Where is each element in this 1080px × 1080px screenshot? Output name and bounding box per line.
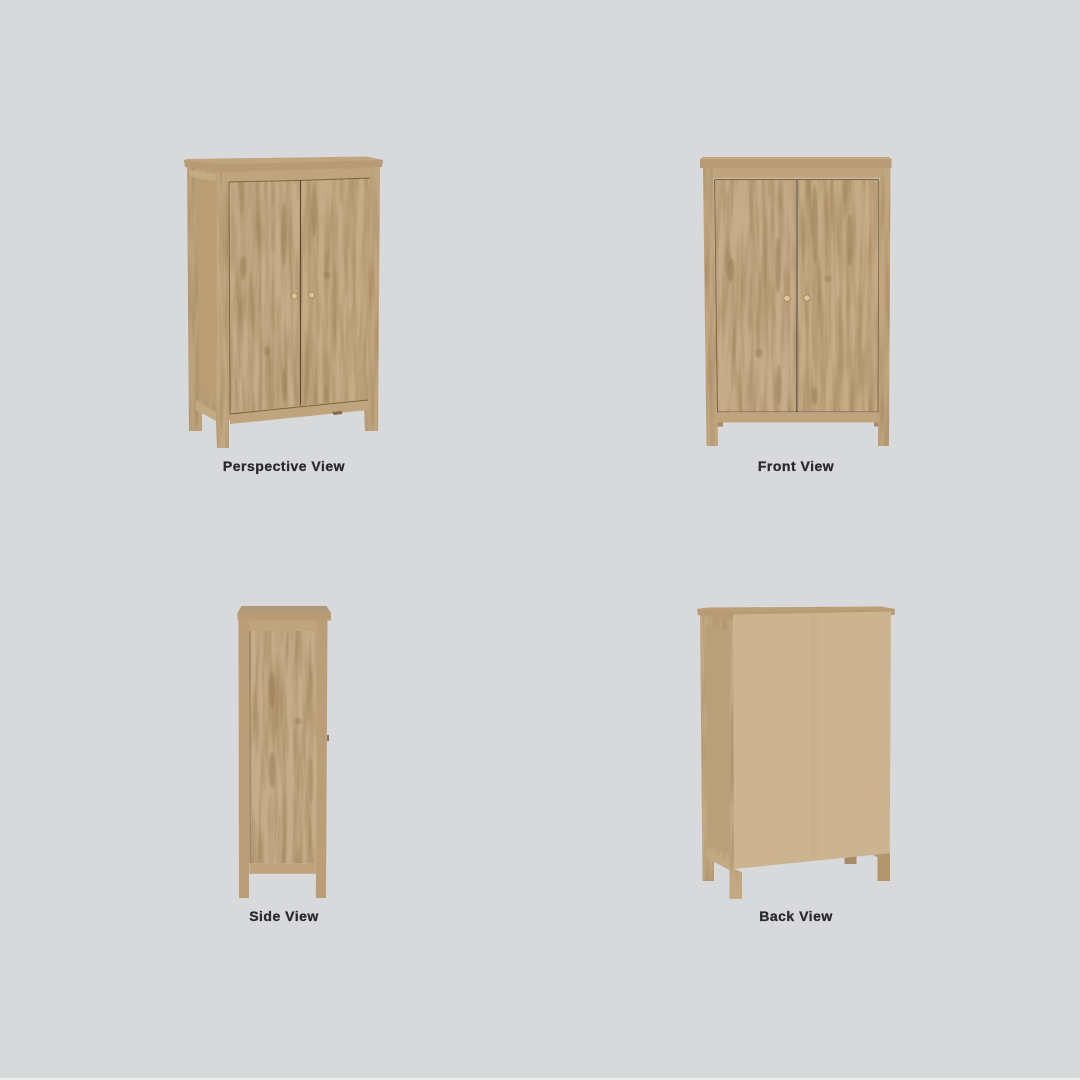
cabinet: side [238,606,331,898]
knobs [292,293,298,299]
panel: perspective view [184,156,383,474]
panel: side view [238,606,331,924]
knob [327,735,329,741]
label: side view: Side View [249,908,319,924]
cabinet top [700,157,892,168]
cabinet top [238,606,331,620]
back panel [733,612,891,869]
cabinet: back [697,606,895,899]
label: front view: Front View [758,458,834,474]
doors [714,180,879,412]
knobs [784,295,790,301]
label: back view: Back View [759,908,833,924]
cabinet: front [700,157,892,446]
cabinet top [184,156,383,172]
label: perspective view: Perspective View [223,458,345,474]
doors [229,178,370,413]
cabinet top [697,606,895,620]
seam strip [810,613,820,858]
cabinet: perspective [184,156,383,448]
panel: front view [700,157,892,474]
side panel [250,631,317,863]
panel: back view [697,606,895,924]
